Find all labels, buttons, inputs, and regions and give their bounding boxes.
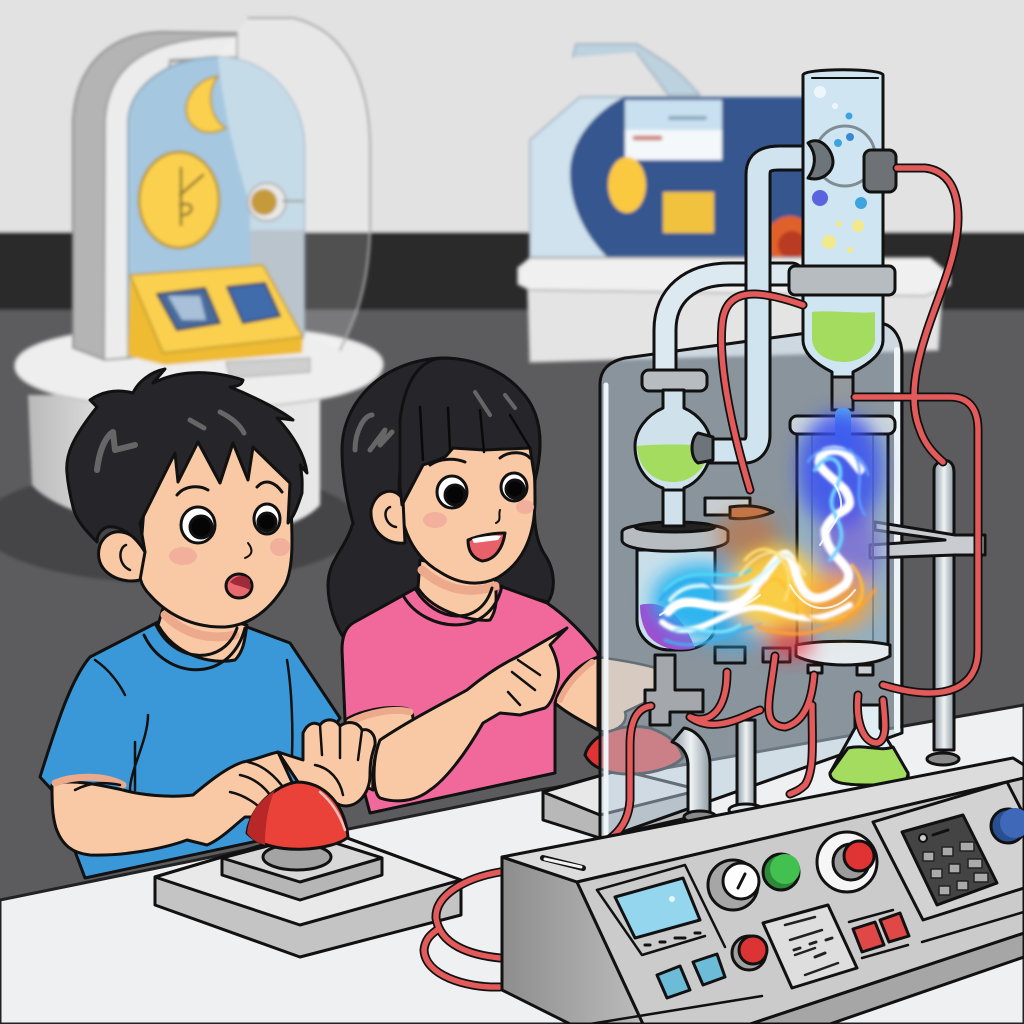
girl face <box>399 420 535 583</box>
acrylic panel <box>600 323 902 840</box>
pedestal <box>28 395 320 535</box>
green liquid <box>812 311 875 362</box>
collar <box>789 266 895 295</box>
boy ear <box>99 532 145 581</box>
top glass column <box>803 70 883 380</box>
girl ear <box>371 491 405 543</box>
gauge <box>708 860 758 910</box>
rainbow energy swirl <box>652 412 882 660</box>
boy hair <box>67 369 307 552</box>
girl eyes <box>437 476 467 508</box>
valve <box>645 655 703 725</box>
capsule shell <box>73 32 237 360</box>
girl hair back <box>328 358 553 640</box>
red tubes outline <box>424 168 978 987</box>
icon: gold medal <box>139 152 219 248</box>
exhibit: right machine display <box>518 44 950 362</box>
swirl highlights <box>660 485 855 615</box>
girl <box>328 358 598 813</box>
blue knob <box>991 809 1024 843</box>
reaction cylinder <box>797 430 888 645</box>
red button: right <box>543 727 700 838</box>
red button: left <box>155 782 461 957</box>
boy eyes <box>181 507 215 543</box>
curved glass pipe lower <box>665 274 792 375</box>
boy <box>40 369 375 878</box>
girl hair front <box>400 358 540 505</box>
girl shirt collar <box>404 586 502 625</box>
small flask <box>830 705 908 785</box>
red switches <box>853 922 884 952</box>
small connectors <box>705 498 750 515</box>
keypad panel <box>873 782 1024 920</box>
boy back hand <box>278 720 375 806</box>
table <box>0 705 1024 1024</box>
lower pipe <box>672 728 710 815</box>
boy face <box>139 420 292 627</box>
control console <box>502 758 1024 1024</box>
exhibit: left capsule display <box>15 18 383 535</box>
boy front arm <box>52 752 297 855</box>
left bulb flask <box>642 370 707 391</box>
nozzle <box>832 377 853 410</box>
label plate <box>763 905 857 988</box>
apparatus: stands and pipes <box>622 70 985 823</box>
boy shirt <box>40 622 340 878</box>
girl hand behind panel <box>598 657 668 732</box>
grey nozzles <box>808 141 833 179</box>
green button <box>763 854 799 890</box>
girl sleeve and arm <box>345 707 415 790</box>
lower vessel <box>637 550 715 650</box>
screen <box>597 865 725 947</box>
boy neck <box>158 608 247 661</box>
yellow control desk <box>128 275 303 365</box>
curved glass pipe upper <box>705 158 812 451</box>
girl mouth <box>468 533 505 561</box>
tube slot <box>543 858 583 868</box>
icon: crescent moon <box>186 76 226 133</box>
girl neck <box>418 560 496 620</box>
swirl glow <box>652 412 882 660</box>
transparent dome <box>218 18 370 350</box>
big red button <box>817 832 877 892</box>
swirl strands <box>660 448 875 645</box>
support post <box>934 460 954 750</box>
red tubes fill <box>424 168 978 987</box>
clamp <box>870 522 985 558</box>
small buttons <box>657 966 690 998</box>
boy mouth <box>226 574 252 598</box>
